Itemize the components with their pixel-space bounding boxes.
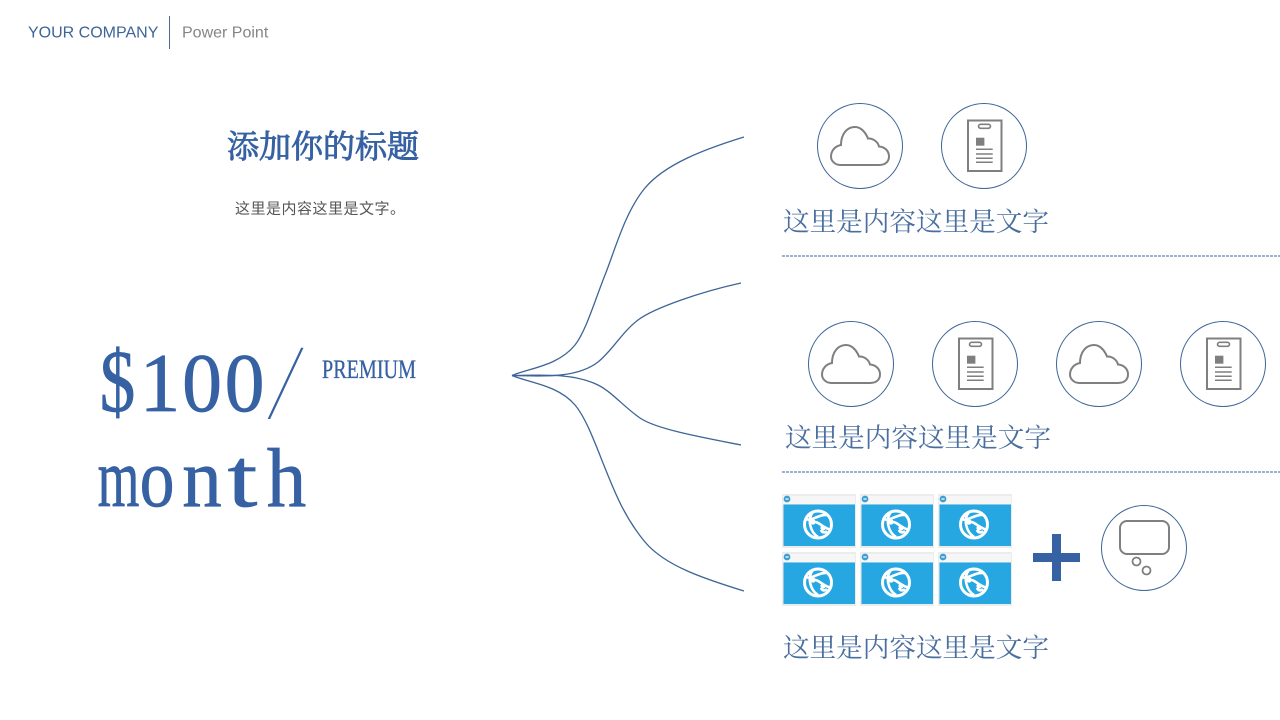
price unit: month [98,431,306,525]
icon: document [942,104,1026,188]
icon row 2 [808,322,1266,406]
browser window icon grid [782,494,1012,606]
header: company name: Power Point [182,24,269,42]
price unit: month: h [267,431,306,525]
title: 添加你的标题 [227,128,419,164]
price: $100/: $ [100,333,135,431]
price unit: month: m [98,432,139,525]
price: $100/: 0 [182,336,222,429]
price: $100/: / [261,323,312,441]
icon: cloud [1056,322,1142,406]
text block: description: 这里是内容这里是文字。 [235,200,406,218]
text: row 1: 这里是内容这里是文字 [783,207,1049,237]
price unit: month: t [228,431,258,524]
text: row 3: 这里是内容这里是文字 [783,633,1049,663]
premium label: PREMIUM [322,355,416,384]
icon row 1 [818,104,1026,188]
header: company name: YOUR COMPANY [28,24,159,42]
header: company name [28,16,269,49]
price: $100/: 0 [225,336,264,429]
icon: cloud [818,104,902,188]
icon: document [1180,322,1266,406]
icon: thought bubble [1102,506,1186,590]
icon: document [932,322,1018,406]
text: row 2: 这里是内容这里是文字 [785,423,1051,453]
icon: cloud [808,322,894,406]
branching curves [512,137,744,591]
plus sign [1033,534,1080,581]
price unit: month: n [182,431,222,525]
price unit: month: o [140,431,174,524]
price: $100/: 1 [140,336,180,429]
price: $100/ [100,323,312,441]
